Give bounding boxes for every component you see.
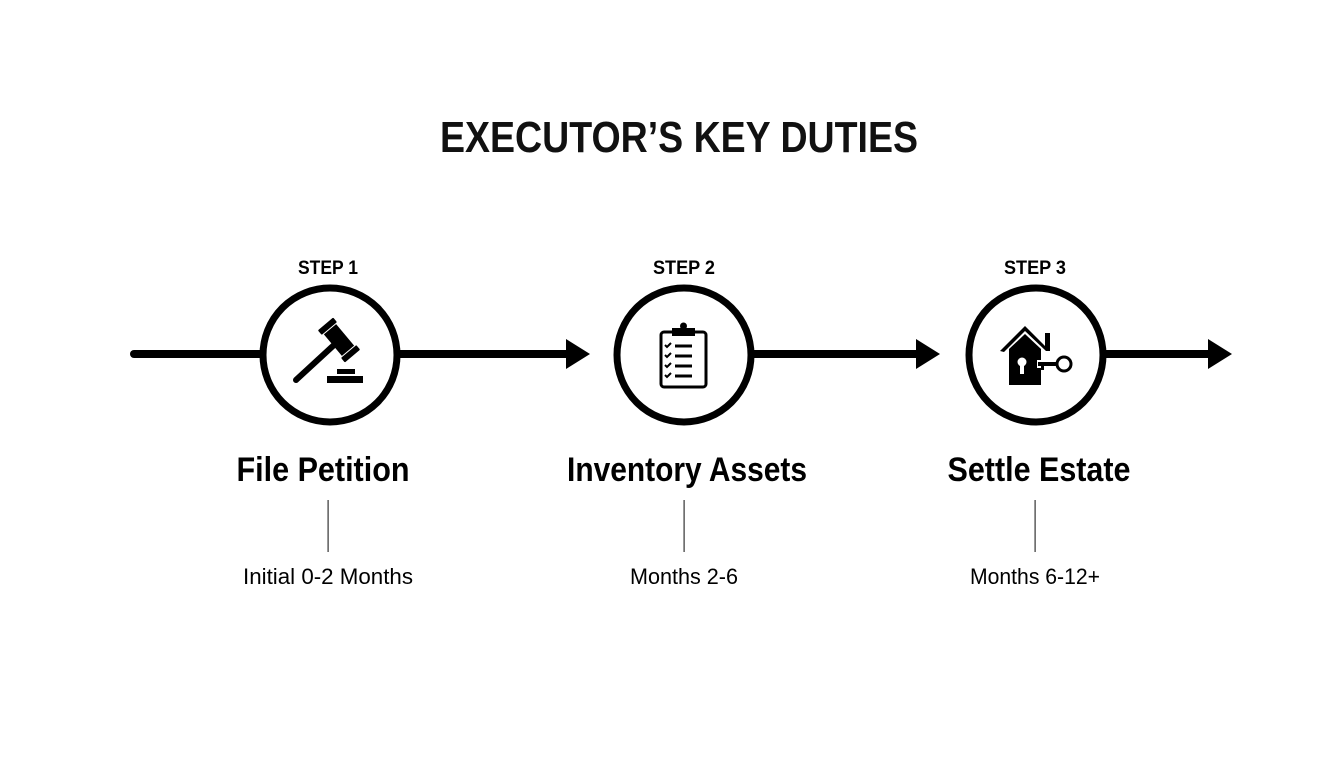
icon: clipboard circle [617, 288, 751, 422]
step 3 name: Settle Estate [948, 451, 1130, 489]
connector [328, 500, 329, 552]
step 2 name: Inventory Assets [567, 451, 807, 489]
step 2 [567, 258, 807, 589]
icon: house key circle [969, 288, 1103, 422]
step 2 label: STEP 2 [653, 258, 715, 279]
step 2 time: Months 2-6 [630, 564, 738, 589]
step 1 [236, 258, 413, 589]
step 3 time: Months 6-12+ [970, 564, 1100, 589]
step 1 label: STEP 1 [298, 258, 358, 279]
step 1 name: File Petition [236, 451, 410, 489]
step 3 label: STEP 3 [1004, 258, 1066, 279]
timeline arrows [130, 339, 1232, 369]
step 3 [948, 258, 1130, 589]
icon: gavel circle [263, 288, 397, 422]
connector [684, 500, 685, 552]
title: EXECUTOR’S KEY DUTIES [440, 113, 918, 162]
step 1 time: Initial 0-2 Months [243, 564, 413, 589]
connector [1034, 500, 1036, 552]
